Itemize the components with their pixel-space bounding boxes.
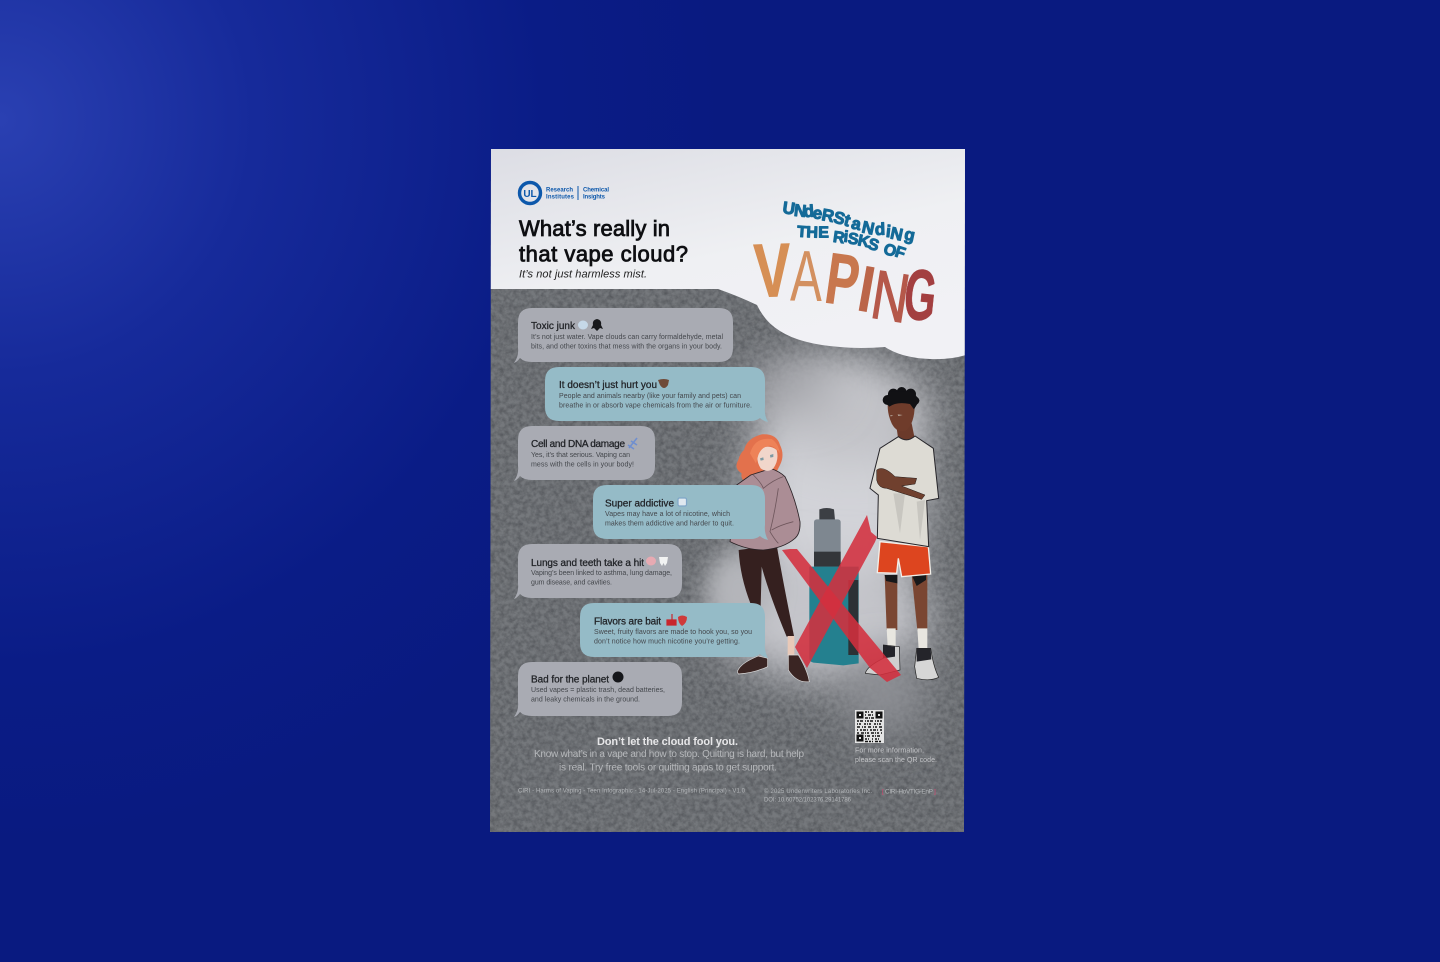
bubble: Cell and DNA damage: [514, 426, 655, 481]
boy: head: [888, 401, 915, 431]
heading: that vape cloud?: [519, 242, 688, 266]
boy: eyes: [890, 414, 903, 416]
title letters: VAPING: V: [753, 227, 792, 313]
icon: UL roundel: UL: [523, 189, 537, 200]
icon: strawberry: [678, 616, 687, 626]
bubble: Bad for the planet: [514, 662, 682, 717]
illustration: boy with crossed arms: [865, 387, 939, 680]
heading: What’s really in: [519, 216, 670, 241]
bubble: It doesn't just hurt you: It doesn’t just hurt you: [559, 380, 657, 391]
poster: [490, 149, 966, 833]
panel: white header with cloud edge: [490, 149, 966, 359]
boy: legs: [885, 575, 927, 630]
girl: hood fold: [753, 475, 783, 488]
bubble: Cell and DNA damage: Yes, it’s that serious. Vaping can: [531, 452, 630, 459]
logo text: Chemical: [583, 188, 609, 194]
bubble: Flavors are bait: Flavors are bait: [594, 616, 661, 628]
illustration: girl in hoodie: [730, 434, 809, 682]
bubble: Lungs and teeth take a hit: [514, 544, 682, 599]
title letters: VAPING: [753, 227, 940, 337]
girl: eyes: [760, 454, 773, 461]
bubble: Flavors are bait: don’t notice how much nicotine you’re getting.: [594, 638, 740, 646]
heading: [519, 216, 688, 266]
girl: fringe: [750, 439, 780, 463]
logo text: Insights: [583, 194, 606, 200]
closing body: Know what’s in a vape and how to stop. Quitting is hard, but help: [534, 749, 804, 760]
girl: lower body: [737, 545, 809, 682]
girl: face: [757, 447, 777, 471]
title line: understanding: UNdeRStaNdiNg: [781, 198, 917, 245]
bubble: Cell and DNA damage: Cell and DNA damage: [531, 439, 625, 450]
icon: DNA helix: [628, 438, 637, 449]
footer: code tag: CIRI-HoVTIG-EnP: [885, 788, 933, 796]
bubble: Flavors are bait: [580, 603, 768, 658]
vape: cap: [819, 508, 835, 520]
girl: sleeve fold: [770, 488, 793, 543]
bubble: Flavors are bait: Sweet, fruity flavors are made to hook you, so you: [594, 629, 752, 636]
girl: ankle: [788, 636, 794, 656]
title art: Understanding the risks of vaping: [753, 198, 940, 337]
girl: leggings: [739, 545, 794, 637]
vape: tank: [814, 519, 841, 568]
boy: shirt shadow folds: [893, 493, 925, 540]
title letters: VAPING: P: [821, 238, 864, 323]
bubble: Lungs and teeth take a hit: Lungs and teeth take a hit: [531, 558, 644, 569]
bubble: Toxic junk: bits, and other toxins that mess with the organs in your body.: [531, 344, 722, 350]
girl: right shoe: [788, 655, 809, 682]
smoke cloud: [706, 361, 930, 733]
icon: cherries: [667, 614, 676, 625]
logo: UL Research Institutes / Chemical Insights: [520, 182, 609, 204]
icon: lungs: [646, 556, 656, 566]
subheading: It’s not just harmless mist.: [519, 268, 647, 280]
boy: right shoe: [915, 648, 939, 680]
chat bubbles: [514, 308, 768, 717]
closing heading: Don’t let the cloud fool you.: [597, 736, 738, 748]
bubble: Super addictive: [593, 485, 768, 540]
tape strip falling: [782, 549, 901, 682]
title letters: VAPING: A: [790, 236, 823, 316]
tape strip rising: [795, 515, 877, 668]
bubble: It doesn't just hurt you: [545, 367, 768, 422]
logo text: Institutes: [546, 194, 575, 200]
logo text: Research: [546, 188, 573, 194]
bubble: Lungs and teeth take a hit: gum disease, and cavities.: [531, 580, 612, 586]
vape: screen: [848, 580, 858, 655]
bubble: Toxic junk: [514, 308, 733, 363]
panel: grey textured lower area: [490, 149, 966, 833]
bubble: Lungs and teeth take a hit: Vaping’s been linked to asthma, lung damage,: [531, 570, 672, 577]
bubble: Bad for the planet: Bad for the planet: [531, 674, 609, 686]
QR caption: [855, 748, 937, 764]
bubble: Bad for the planet: Used vapes = plastic trash, dead batteries,: [531, 687, 665, 694]
icon: phone notification: [678, 498, 686, 506]
icon: globe: [612, 672, 624, 682]
bubble: Super addictive: Vapes may have a lot of nicotine, which: [605, 511, 730, 518]
icon: skull and crossbones: [591, 319, 603, 331]
boy: shorts: [877, 542, 931, 577]
closing body: [534, 749, 804, 774]
illustration: vape device: [809, 508, 859, 665]
bubble: Bad for the planet: and leaky chemicals in the ground.: [531, 696, 640, 704]
bubble: Super addictive: Super addictive: [605, 498, 674, 510]
title letters: VAPING: I: [853, 252, 881, 327]
bubble: Toxic junk: It’s not just water. Vape clouds can carry formaldehyde, metal: [531, 334, 723, 341]
girl: left shoe: [737, 656, 768, 674]
footer: code tag: [: [882, 788, 884, 796]
boy: t-shirt: [870, 436, 939, 547]
bubble: It doesn't just hurt you: breathe in or absorb vape chemicals from the air or furniture.: [559, 402, 752, 410]
footer: document line: CIRI - Harms of Vaping - Teen Infographic - 14-Jul-2025 - English (Principal) - V1.0: [518, 788, 746, 794]
QR caption: For more information,: [855, 748, 924, 754]
closing body: is real. Try free tools or quitting apps to get support.: [559, 762, 777, 774]
bubble: Super addictive: makes them addictive and harder to quit.: [605, 520, 734, 528]
title letters: VAPING: G: [900, 254, 940, 337]
bubble: Toxic junk: Toxic junk: [531, 321, 576, 332]
QR code: [855, 710, 884, 743]
vape: tank dark band: [814, 552, 841, 567]
bubble: It doesn't just hurt you: People and animals nearby (like your family and pets) can: [559, 393, 741, 400]
vape: body: [809, 567, 859, 665]
footer: copyright and DOI: DOI: 10.60752/102376.29141786: [764, 798, 852, 804]
girl: hair back: [736, 434, 782, 483]
boy: shoe collars: [883, 645, 931, 662]
title letters: VAPING: N: [867, 256, 914, 337]
logo text: [546, 186, 609, 200]
closing message: [534, 736, 804, 774]
boy: curly hair: [883, 387, 919, 409]
title line: the risks of: THE RiSKS OF: [796, 224, 908, 263]
icon: dog: [658, 379, 669, 388]
footer: code tag: ]: [934, 788, 936, 796]
boy: crossed arms: [877, 468, 925, 499]
bubble: Cell and DNA damage: mess with the cells in your body!: [531, 462, 634, 468]
QR caption: please scan the QR code.: [855, 757, 937, 764]
boy: neck: [896, 423, 915, 440]
footer: copyright and DOI: © 2025 Underwriters Laboratories Inc.: [764, 788, 872, 795]
girl: upper body: [730, 434, 800, 550]
boy: undershorts: [885, 575, 926, 586]
icon: cloud: [578, 320, 588, 330]
texture: mottled speckle: [490, 280, 966, 833]
red X tape over the vape: [782, 515, 901, 682]
girl: hoodie: [730, 468, 800, 550]
footer: copyright and DOI: [764, 788, 872, 804]
icon: tooth: [659, 557, 668, 566]
boy: left shoe: [865, 645, 900, 675]
boy: socks: [887, 628, 927, 649]
